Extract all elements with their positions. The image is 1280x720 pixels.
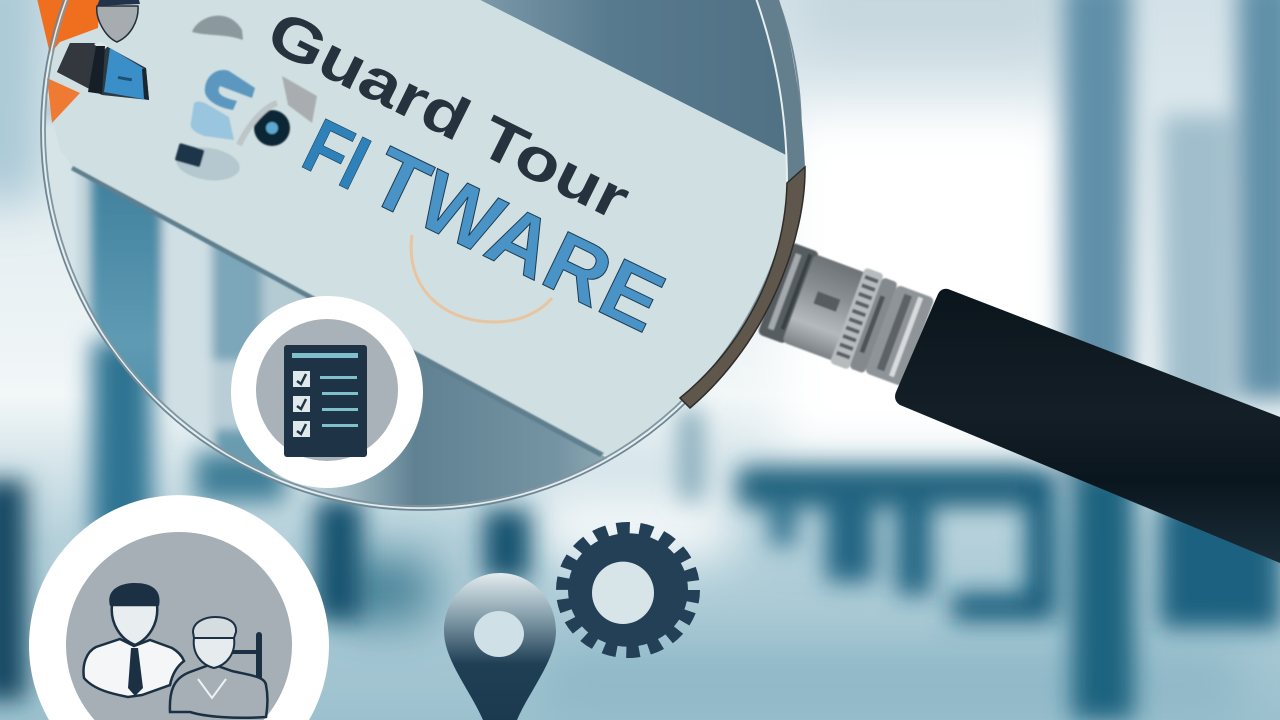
rim (41, 0, 801, 510)
brown rim segment near the handle (680, 167, 805, 408)
blurred columns seen through lens (44, 117, 281, 480)
icon: guards badge (29, 495, 329, 720)
icon: gear (563, 529, 693, 651)
black grip (895, 289, 1280, 563)
guard with radio, rear right (170, 617, 268, 718)
magnifying glass handle (757, 240, 1280, 563)
icon: location pin (444, 573, 556, 720)
icon: checklist badge (231, 296, 423, 488)
T W A R E letters: TWARE (356, 130, 678, 351)
checklist rows (293, 371, 358, 437)
steel rim band at upper right (753, 0, 805, 183)
magnifying glass lens (37, 0, 806, 511)
faint orange swirl (411, 235, 552, 322)
tilted white card (20, 0, 830, 465)
F I letters: FI (291, 101, 383, 207)
orange logo shapes (35, 0, 100, 54)
metal neck (757, 240, 936, 389)
dark panel upper right (480, 0, 786, 155)
heading: Software (partly hidden by the swoosh) (291, 101, 678, 351)
logo: broken swoosh fragments (174, 16, 317, 184)
logo: guard figure (57, 0, 149, 100)
heading: Guard Tour: Guard Tour (257, 0, 640, 233)
guard in white shirt, front left (84, 583, 184, 697)
